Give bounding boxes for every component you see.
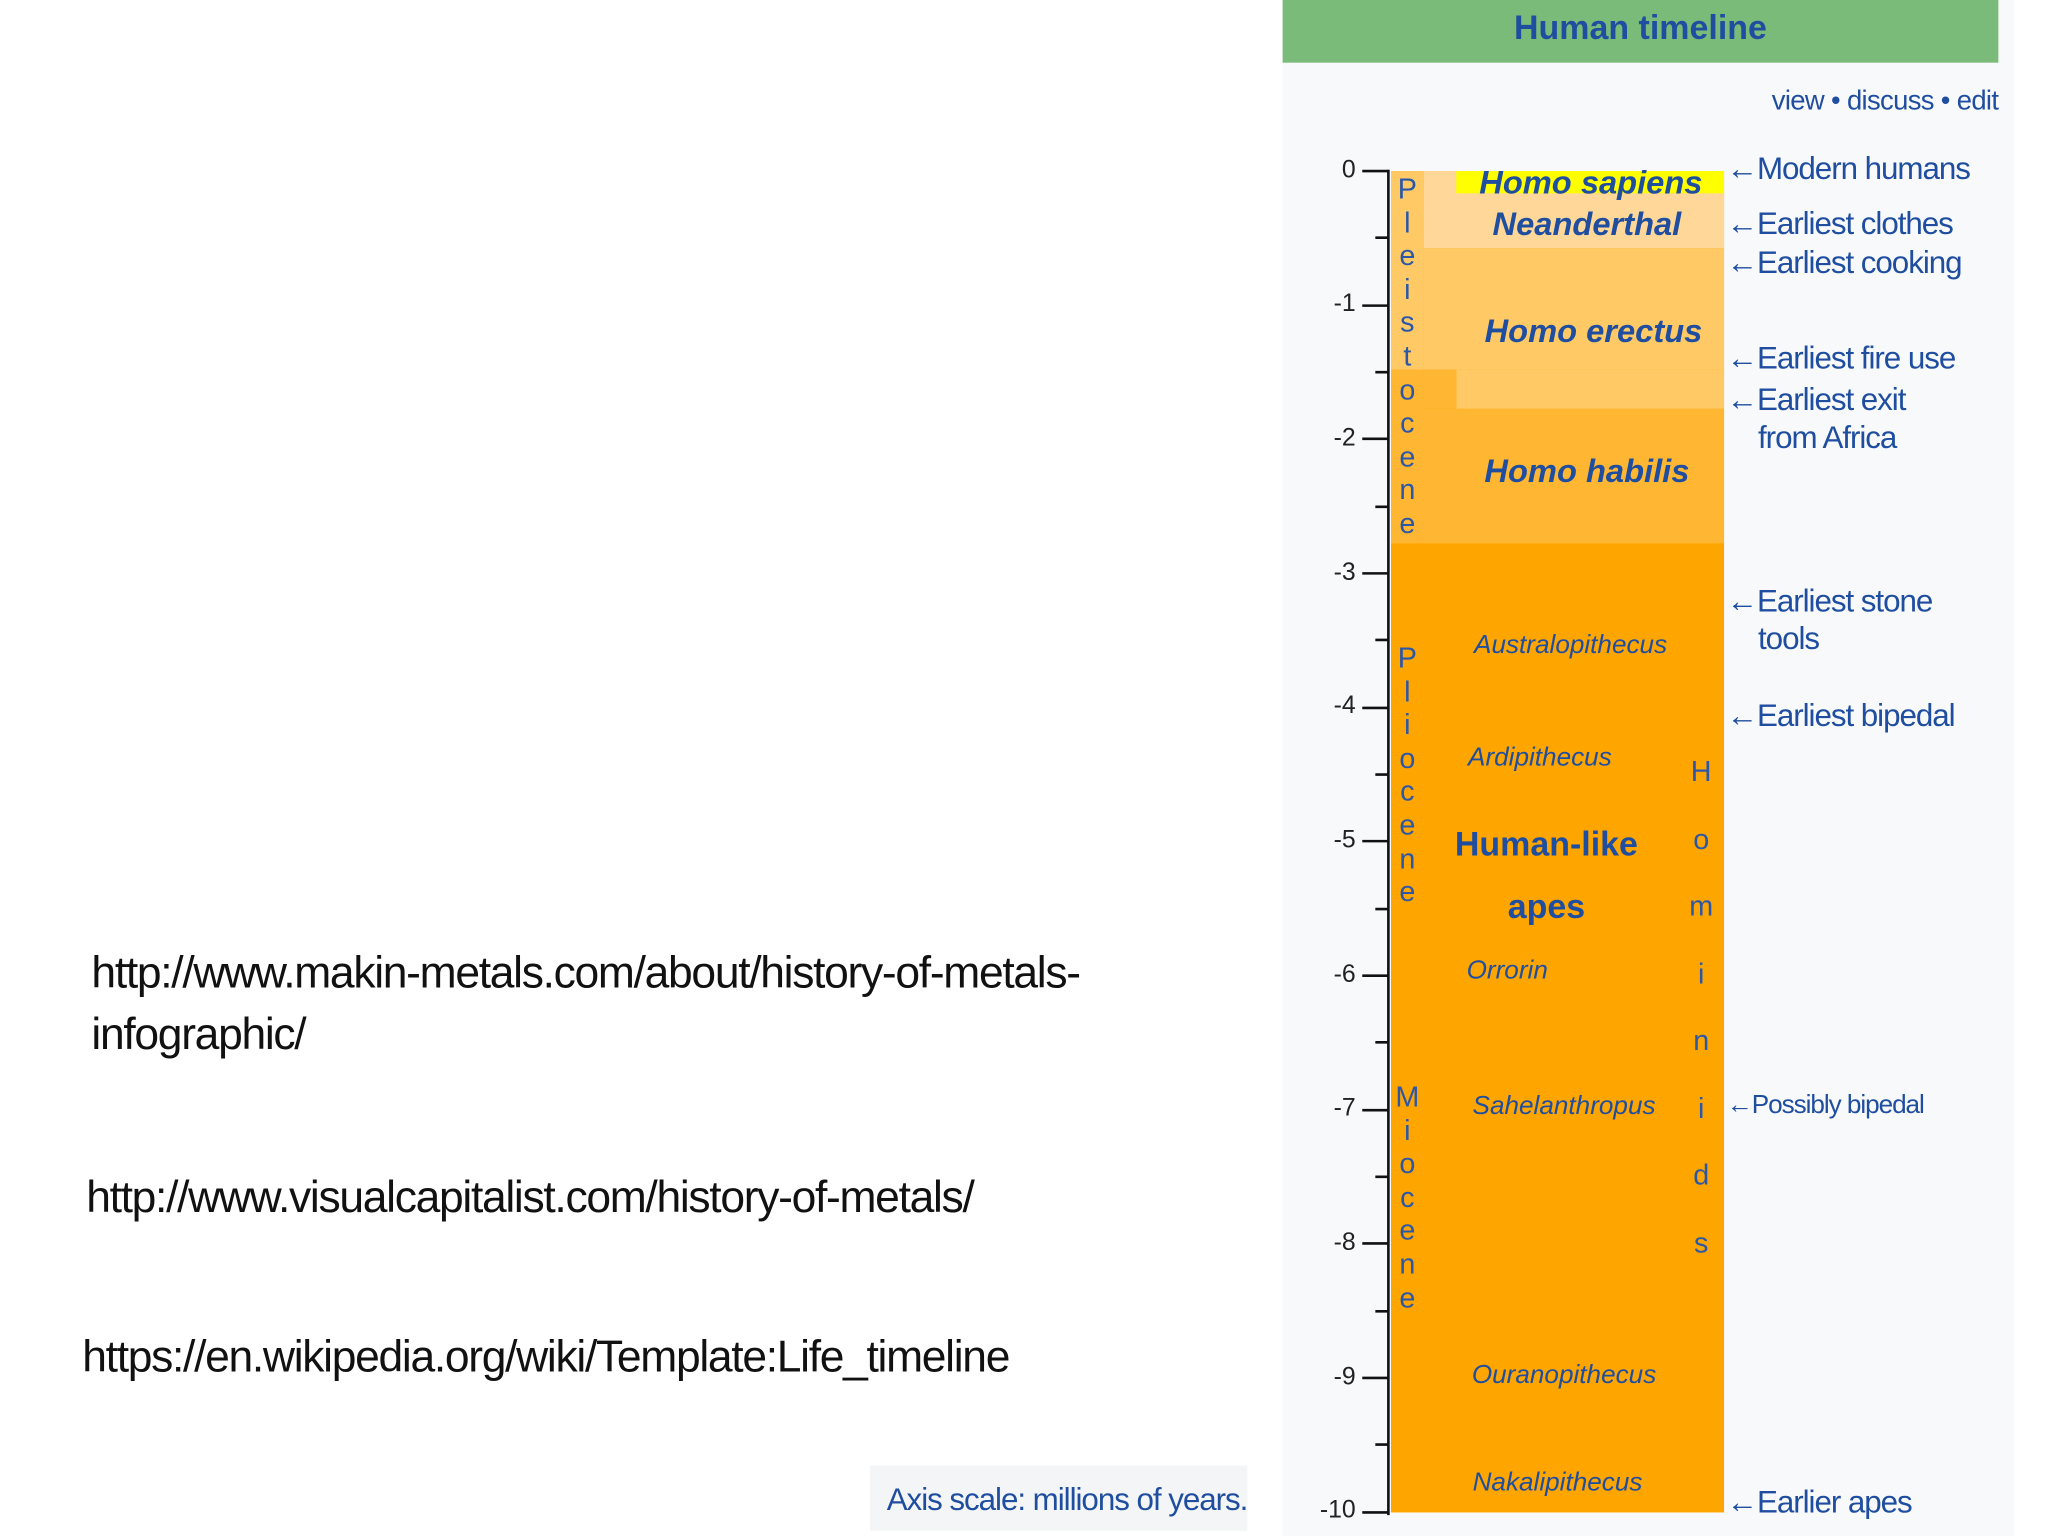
epoch: Miocene: M: [1395, 1080, 1419, 1113]
hominids vertical label: n: [1693, 1024, 1709, 1057]
annotations with arrows: ←Possibly bipedal: [1727, 1091, 1924, 1119]
axis scale note: [870, 1465, 1247, 1531]
text: -5: [1334, 827, 1356, 854]
epoch: Pliocene: e: [1399, 808, 1415, 841]
annotations with arrows: ←Modern humans: [1727, 152, 1970, 187]
epoch: Miocene: c: [1400, 1180, 1415, 1213]
panel: human timeline: [1283, 0, 2014, 1536]
epoch: Miocene: n: [1399, 1247, 1415, 1280]
epoch: Pliocene: [1398, 641, 1417, 908]
text: -9: [1334, 1364, 1356, 1391]
epoch: Pliocene: l: [1404, 675, 1411, 707]
species labels: Nakalipithecus: [1473, 1468, 1642, 1497]
view discuss edit links: view • discuss • edit: [1772, 86, 1998, 116]
hominids vertical label: o: [1693, 822, 1709, 855]
epoch: Pleistocene: e: [1399, 507, 1415, 539]
epoch: Miocene: [1395, 1080, 1419, 1313]
species labels: Sahelanthropus: [1473, 1092, 1656, 1121]
url text 1: infographic/: [91, 1010, 305, 1059]
text: -1: [1334, 290, 1356, 317]
hominids vertical label: H: [1691, 755, 1712, 788]
species labels: Ouranopithecus: [1472, 1361, 1656, 1390]
hominids vertical label: [1689, 755, 1713, 1258]
annotations with arrows: ←Earliest fire use: [1727, 341, 1955, 376]
annotations with arrows: ←Earliest stone: [1727, 584, 1932, 619]
text: 0: [1342, 157, 1356, 184]
epoch: Pleistocene: t: [1403, 340, 1411, 372]
species labels: Neanderthal: [1493, 206, 1681, 243]
epoch: Pleistocene: s: [1400, 306, 1415, 339]
epoch: Pliocene: i: [1404, 708, 1411, 741]
species labels: Homo habilis: [1484, 453, 1689, 490]
epoch: Pleistocene: P: [1398, 172, 1417, 205]
epoch: Pleistocene: e: [1399, 440, 1415, 472]
epoch: Pleistocene: e: [1399, 239, 1415, 272]
epoch: Pleistocene: i: [1404, 273, 1411, 305]
epoch: Pliocene: P: [1398, 641, 1417, 674]
axis scale note: Axis scale: millions of years.: [887, 1482, 1247, 1518]
epoch: Miocene: e: [1399, 1214, 1415, 1247]
url text 1: [91, 948, 1080, 1059]
text: -7: [1334, 1095, 1356, 1122]
epoch: Pliocene: n: [1399, 842, 1415, 875]
epoch: Miocene: e: [1399, 1281, 1415, 1313]
annotations with arrows: ←Earlier apes: [1727, 1485, 1912, 1520]
species labels: Ardipithecus: [1468, 743, 1612, 772]
annotations with arrows: ←Earliest clothes: [1727, 206, 1953, 242]
species labels: Australopithecus: [1474, 631, 1667, 660]
epoch: Pleistocene: l: [1404, 206, 1411, 238]
annotations with arrows: ←Earliest bipedal: [1727, 699, 1955, 734]
title header: [1283, 0, 1998, 63]
text: -2: [1334, 424, 1356, 452]
url text 3: https://en.wikipedia.org/wiki/Template:Life_timeline: [82, 1332, 1009, 1382]
text: -8: [1334, 1229, 1356, 1256]
hominids vertical label: d: [1693, 1159, 1709, 1191]
epoch: Pleistocene: o: [1399, 373, 1415, 406]
species labels: Homo sapiens: [1479, 165, 1702, 201]
epoch: Pleistocene: c: [1400, 406, 1415, 439]
species labels: Human-like: [1455, 824, 1638, 863]
url text 1: http://www.makin-metals.com/about/history-of-metals-: [91, 948, 1080, 998]
hominids vertical label: i: [1698, 957, 1704, 989]
species labels: apes: [1508, 887, 1585, 926]
text: -10: [1320, 1497, 1356, 1524]
text: -6: [1334, 961, 1356, 989]
title header: Human timeline: [1514, 8, 1767, 47]
text: -3: [1334, 559, 1356, 586]
text: -4: [1334, 692, 1356, 720]
axis labels: [1320, 157, 1356, 1524]
annotations with arrows: ←Earliest cooking: [1727, 246, 1962, 281]
annotations with arrows: tools: [1758, 622, 1819, 657]
epoch: Pliocene: o: [1399, 742, 1415, 774]
epoch: Pliocene: e: [1399, 875, 1415, 908]
annotations with arrows: ←Earliest exit: [1727, 383, 1905, 418]
hominids vertical label: i: [1698, 1091, 1704, 1124]
timeline bars: [1391, 171, 1724, 1512]
hominids vertical label: m: [1689, 889, 1713, 922]
species labels: Homo erectus: [1485, 313, 1702, 350]
hominids vertical label: s: [1694, 1226, 1708, 1258]
annotations with arrows: from Africa: [1758, 421, 1896, 456]
url text 2: http://www.visualcapitalist.com/history-of-metals/: [86, 1173, 973, 1223]
epoch: Pleistocene: n: [1399, 473, 1415, 506]
epoch: Miocene: o: [1399, 1147, 1415, 1180]
epoch: Miocene: i: [1404, 1114, 1411, 1146]
species labels: Orrorin: [1467, 956, 1548, 985]
axis with ticks: [1362, 170, 1390, 1516]
epoch: Pleistocene: [1398, 172, 1417, 539]
annotations with arrows: [1727, 152, 1970, 1520]
species labels: [1455, 165, 1702, 1497]
epoch: Pliocene: c: [1400, 775, 1415, 808]
